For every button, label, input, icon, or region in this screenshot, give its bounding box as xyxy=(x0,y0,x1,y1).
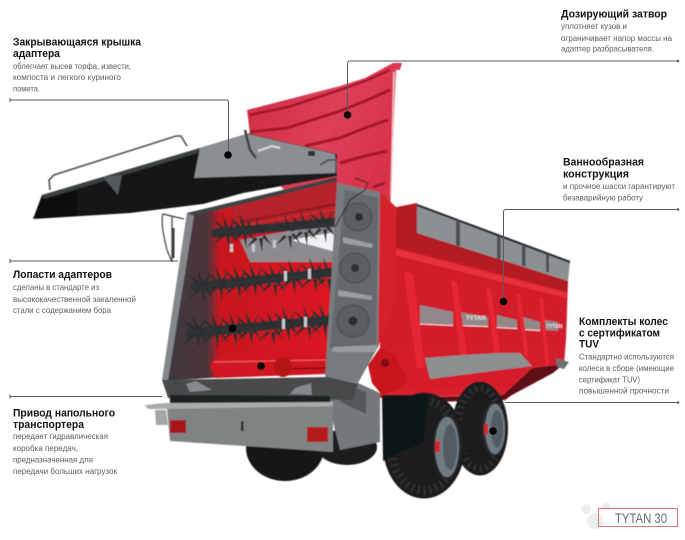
heading: adapter cover: Закрывающаяся крышка xyxy=(13,36,142,48)
description: adapter blades: высококачественной закаленной xyxy=(13,294,136,304)
marker: dosing gate xyxy=(344,111,351,119)
description: adapter cover: компоста и легкого куриного xyxy=(13,72,121,82)
marker: floor conveyor drive xyxy=(257,362,265,370)
description: floor conveyor drive: коробка передач, xyxy=(13,443,78,453)
text block: adapter cover xyxy=(13,36,142,94)
rear interior with rotors xyxy=(162,177,340,381)
description: dosing gate: уплотняет кузов и xyxy=(561,21,627,31)
heading: adapter cover xyxy=(13,36,142,60)
marker: wheels xyxy=(489,427,497,435)
rear wheel xyxy=(452,382,508,476)
mudguard xyxy=(382,395,428,461)
description: wheels: повышенной прочности xyxy=(579,386,669,396)
description: wheels: сертификат TUV) xyxy=(579,374,640,384)
watermark blobs xyxy=(581,503,610,529)
model labels on body xyxy=(466,316,563,330)
rear bumper with lamps xyxy=(145,402,333,452)
red hydraulic cylinder xyxy=(210,356,327,378)
text block: bathtub body xyxy=(563,156,675,202)
body vertical ribs xyxy=(404,272,549,369)
tandem wheels xyxy=(382,382,508,498)
front wheel xyxy=(383,392,465,498)
model labels on body: TYTAN xyxy=(546,324,563,330)
heading: wheels: с сертификатом xyxy=(579,328,660,340)
heading: dosing gate: Дозирующий затвор xyxy=(561,8,667,20)
text block: wheels xyxy=(579,316,674,396)
description: adapter cover: облегчает высев торфа, извести, xyxy=(13,61,131,71)
heading: bathtub body xyxy=(563,156,644,180)
rotor shafts xyxy=(190,222,337,333)
machine: manure spreader xyxy=(33,63,570,498)
heading: floor conveyor drive xyxy=(13,408,115,431)
heading: bathtub body: Ваннообразная xyxy=(563,156,644,168)
strip white edges xyxy=(420,324,540,330)
description: wheels xyxy=(579,352,674,396)
rear far wheel under the adapter xyxy=(246,415,377,481)
description: adapter blades: стали с содержанием бора xyxy=(13,305,111,315)
heading: adapter blades: Лопасти адаптеров xyxy=(13,269,112,281)
leader line: floor conveyor drive xyxy=(10,394,162,398)
marker: adapter cover xyxy=(224,151,232,159)
text block: adapter blades xyxy=(13,269,136,315)
heading: floor conveyor drive: Привод напольного xyxy=(13,408,115,420)
leader line: bathtub body xyxy=(504,209,679,301)
marker: adapter blades xyxy=(229,325,236,332)
description: floor conveyor drive xyxy=(13,431,117,476)
heading: wheels: TUV xyxy=(579,338,600,350)
description: floor conveyor drive: передает гидравлическая xyxy=(13,431,108,441)
leader line: adapter cover xyxy=(10,98,228,155)
description: bathtub body: и прочное шасси гарантируют xyxy=(563,181,675,191)
logo: TYTAN 30: TYTAN 30 xyxy=(615,511,667,526)
heading: floor conveyor drive: транспортера xyxy=(13,419,85,431)
heading: bathtub body: конструкция xyxy=(563,168,629,180)
marker: bathtub body xyxy=(500,298,507,305)
description: dosing gate xyxy=(561,21,672,54)
description: adapter blades xyxy=(13,282,136,315)
leader line: dosing gate xyxy=(348,60,679,115)
description: dosing gate: адаптер разбрасывателя. xyxy=(561,44,654,54)
description: bathtub body: безаварийную работу xyxy=(563,192,644,202)
heading: wheels xyxy=(579,316,668,350)
hydraulic lines xyxy=(162,214,184,262)
rotor blades xyxy=(182,207,340,349)
description: floor conveyor drive: предназначенная для xyxy=(13,454,93,464)
lower grey frame xyxy=(162,377,380,450)
logo: TYTAN 30 xyxy=(598,508,678,526)
text block: floor conveyor drive xyxy=(13,408,117,476)
red spreader body xyxy=(380,203,570,403)
description: adapter cover xyxy=(13,61,131,94)
open adapter cover xyxy=(33,130,337,219)
description: floor conveyor drive: передачи больших нагрузок xyxy=(13,466,117,476)
red dosing gate xyxy=(247,63,402,210)
description: wheels: Стандартно используются xyxy=(579,352,674,362)
description: bathtub body xyxy=(563,181,675,202)
description: adapter blades: сделаны в стандарте из xyxy=(13,282,99,292)
heading: adapter cover: адаптера xyxy=(13,48,61,60)
body grey label strips xyxy=(420,305,558,331)
description: wheels: колеса в сборе (имеющие xyxy=(579,363,674,373)
leader line: wheels xyxy=(505,402,679,403)
text block: dosing gate xyxy=(561,8,672,54)
red hinge xyxy=(368,348,408,395)
grey bearing column xyxy=(325,178,396,383)
grey step xyxy=(425,353,532,379)
leader line: adapter blades xyxy=(10,259,178,263)
description: adapter cover: помета. xyxy=(13,84,40,94)
description: dosing gate: ограничивает напор массы на xyxy=(561,33,672,43)
model labels on body: TYTAN xyxy=(466,316,486,322)
heading: wheels: Комплекты колес xyxy=(579,316,668,328)
